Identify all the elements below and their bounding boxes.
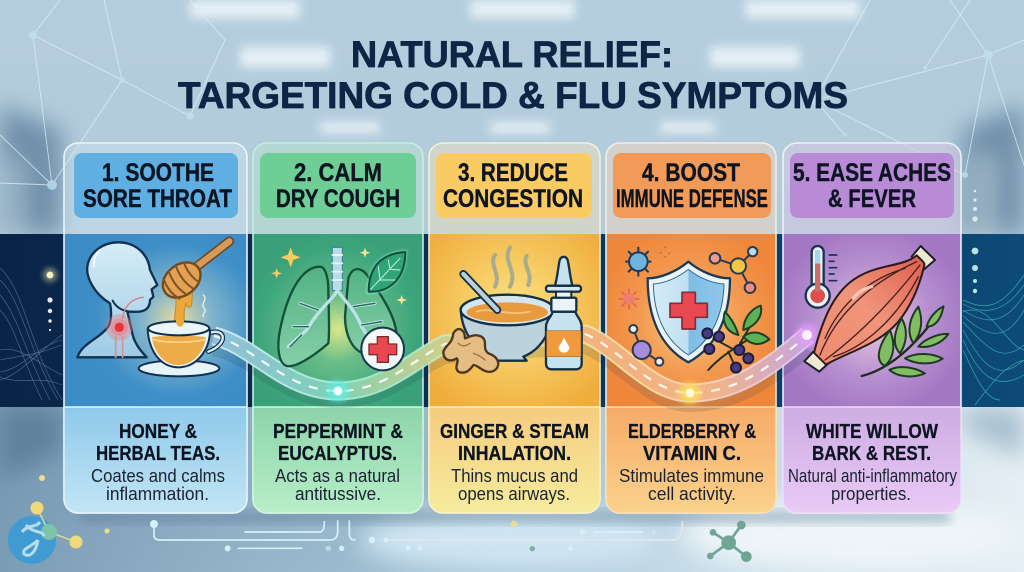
text 1 [91,420,225,504]
decoration: circuit lines and dots below the cards [150,520,682,551]
text 4: ELDERBERRY & [628,420,756,443]
title: NATURAL RELIEF: [351,34,673,75]
text 5: properties. [831,483,911,504]
title: TARGETING COLD & FLU SYMPTOMS [178,75,848,116]
text 5: Natural anti-inflammatory [788,465,958,486]
text 4 [619,420,764,504]
logo badge bottom left [8,502,82,564]
text 2 [273,420,403,504]
heading 2: 2. CALM [294,159,382,187]
heading 3: CONGESTION [443,185,583,213]
heading 4: IMMUNE DEFENSE [616,185,768,213]
panel: 1 soothe sore throat [64,143,247,513]
heading 2: DRY COUGH [276,185,400,213]
arrow: winding road linking the five panels [214,334,808,402]
text 5: WHITE WILLOW [806,420,939,443]
icon: molecule bottom right [707,521,785,562]
icon: lungs with leaf and medical cross [271,247,407,370]
text 2: antitussive. [295,483,381,504]
heading 3 [436,153,592,218]
heading 1: 1. SOOTHE [102,159,214,187]
heading 2 [260,153,416,218]
heading 1: SORE THROAT [83,185,232,213]
heading 5: 5. EASE ACHES [793,159,951,187]
glow marker: amber [679,382,701,404]
heading 1 [74,153,238,218]
icon: soup bowl, ginger and nasal spray [443,247,582,373]
text 4: cell activity. [648,483,736,504]
icon: head with sore throat and honey tea [77,241,229,376]
text 3: opens airways. [458,483,570,504]
heading 4: 4. BOOST [642,159,740,187]
dark band behind the cards [0,190,1024,407]
decoration: yellow dots bottom left [39,475,518,534]
text 1: Coates and calms [91,465,225,486]
text 2: PEPPERMINT & [273,420,403,443]
panel: 3 reduce congestion [429,143,600,513]
text 5: BARK & REST. [812,442,931,465]
panel: 5 ease aches and fever [783,143,961,513]
glow marker: cyan [327,380,349,402]
icon: shield, molecules and elderberries [619,246,769,373]
network lines top corners [0,0,1024,190]
text 3: GINGER & STEAM [440,420,589,443]
text 1: inflammation. [106,483,209,504]
icon: muscle, thermometer and willow branch [804,246,948,376]
text 1: HONEY & [119,420,197,443]
text 2: Acts as a natural [275,465,400,486]
text 3: INHALATION. [458,442,571,465]
title [178,34,848,116]
heading 5: & FEVER [828,185,916,213]
glow marker: violet [796,324,818,346]
soft shadow under the cards [80,511,950,523]
text 4: Stimulates immune [619,465,764,486]
text 1: HERBAL TEAS. [96,442,220,465]
panel: 4 boost immune defense [606,143,776,513]
heading 4 [613,153,771,218]
text 4: VITAMIN C. [643,442,741,465]
heading 3: 3. REDUCE [458,159,568,187]
text 3 [440,420,589,504]
text 3: Thins mucus and [451,465,578,486]
panel: 2 calm dry cough [253,143,423,513]
text 2: EUCALYPTUS. [278,442,397,465]
heading 5 [790,153,954,218]
text 5 [788,420,958,504]
